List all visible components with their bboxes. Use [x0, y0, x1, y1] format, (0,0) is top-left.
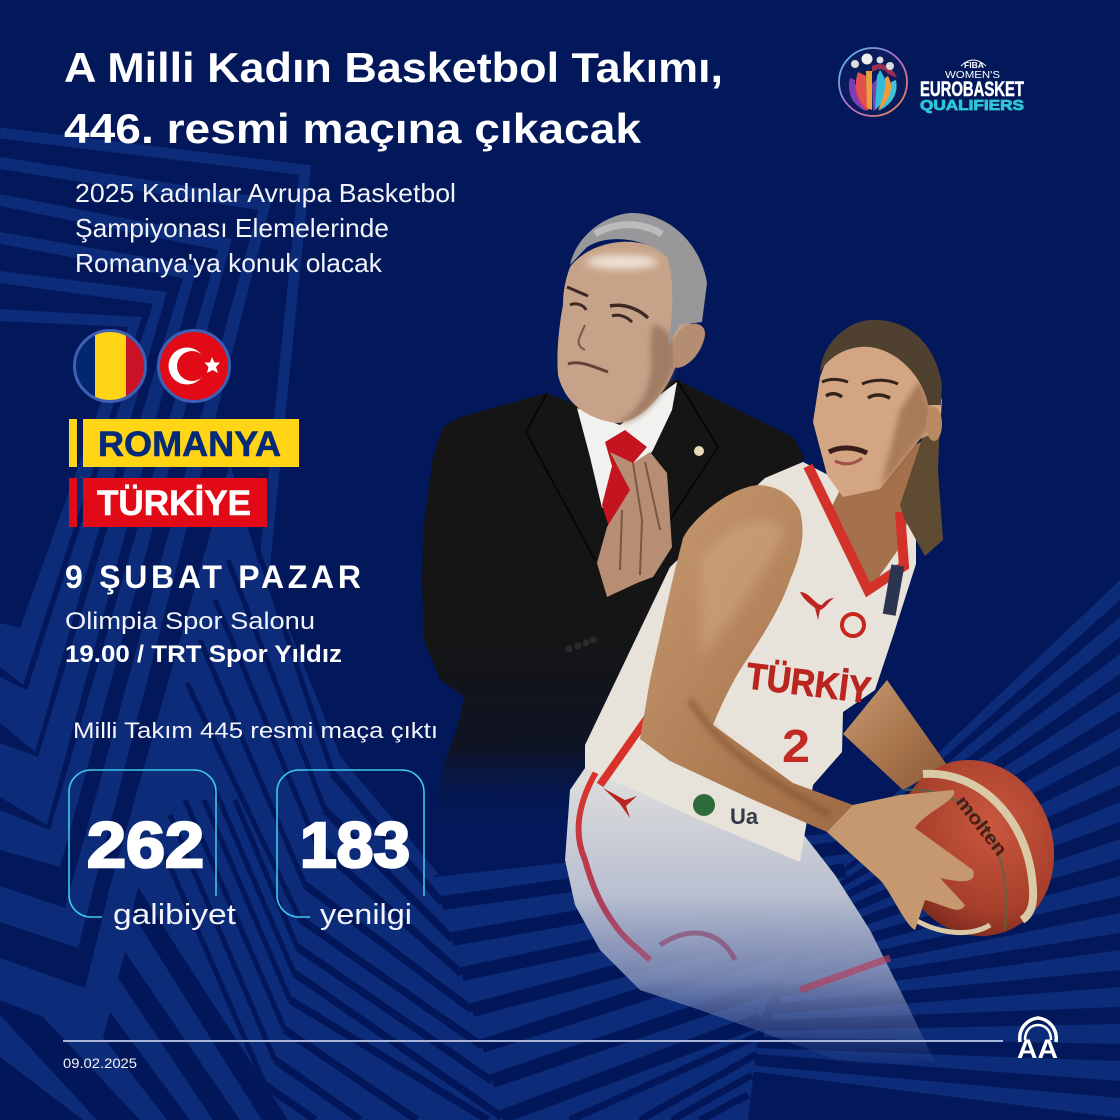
player back arm	[843, 680, 947, 790]
jersey sponsor	[693, 794, 759, 829]
coach head	[557, 213, 707, 423]
icon: Anadolu Agency logo: AA	[1017, 1034, 1058, 1064]
player neck	[830, 440, 925, 592]
team label: Romanya: ROMANYA	[98, 425, 281, 464]
date: 09.02.2025	[63, 1056, 137, 1071]
logo wordmark: QUALIFIERS	[920, 97, 1024, 114]
time and broadcaster: 19.00 / TRT Spor Yıldız	[65, 641, 342, 668]
coach jacket	[422, 380, 805, 840]
logo emblem	[839, 48, 907, 116]
flag: Romania	[74, 330, 146, 402]
jersey wordmark: TÜRKİY	[744, 655, 873, 711]
subtitle: Romanya'ya konuk olacak	[75, 248, 383, 278]
player ear	[926, 407, 942, 441]
stat: losses: yenilgi	[320, 899, 412, 931]
shorts puma logo	[603, 788, 637, 818]
title	[64, 44, 723, 152]
basketball	[873, 739, 1077, 957]
match date: 9 ŞUBAT PAZAR	[65, 559, 361, 595]
photo: player	[565, 320, 1077, 1065]
coach ear	[673, 324, 705, 368]
title: 446. resmi maçına çıkacak	[64, 105, 642, 152]
logo wordmark: FIBA	[964, 61, 984, 70]
player shorts	[565, 768, 935, 1065]
subtitle	[75, 178, 456, 278]
team label: Türkiye: TÜRKİYE	[97, 484, 251, 523]
team label: Romanya	[69, 419, 299, 467]
jersey number: 2	[782, 720, 810, 772]
footer rule	[63, 1040, 1003, 1042]
player collar	[808, 466, 904, 590]
player front arm	[640, 485, 973, 930]
venue: Olimpia Spor Salonu	[65, 608, 315, 635]
stat: wins: 262	[87, 809, 204, 881]
stats heading: Milli Takım 445 resmi maça çıktı	[73, 718, 438, 743]
coach tie	[602, 430, 647, 530]
coach shirt	[577, 382, 677, 508]
coach hair	[570, 213, 707, 345]
coach hands	[597, 452, 672, 597]
icon: Anadolu Agency logo	[1017, 1018, 1058, 1064]
player head	[813, 320, 942, 497]
jersey patch	[883, 564, 904, 616]
stat: wins	[69, 770, 236, 931]
jersey crest	[842, 614, 864, 636]
coach sleeve buttons	[565, 636, 597, 653]
subtitle: Şampiyonası Elemelerinde	[75, 213, 389, 243]
event logo: FIBA Women's EuroBasket Qualifiers	[839, 48, 1024, 116]
player hand on ball	[827, 790, 974, 930]
flag: Turkey	[158, 330, 230, 402]
basketball: molten	[951, 792, 1011, 860]
player ponytail	[900, 420, 943, 556]
stat: losses	[277, 770, 424, 931]
logo wordmark: EUROBASKET	[920, 78, 1024, 101]
photo: coach	[422, 213, 805, 840]
subtitle: 2025 Kadınlar Avrupa Basketbol	[75, 178, 456, 208]
player hair	[820, 320, 942, 405]
coach lapels	[526, 380, 718, 560]
shorts side stripe	[579, 772, 650, 960]
logo wordmark: WOMEN'S	[945, 70, 1000, 81]
team label: Türkiye	[69, 478, 267, 527]
title: A Milli Kadın Basketbol Takımı,	[64, 44, 723, 91]
jersey puma logo	[800, 592, 834, 620]
jersey sponsor: Ua	[730, 804, 759, 829]
stat: wins: galibiyet	[113, 899, 236, 931]
jersey trim	[600, 710, 653, 785]
logo wordmark	[920, 60, 1024, 114]
stat: losses: 183	[300, 809, 410, 881]
coach eyes and mouth	[567, 287, 648, 372]
coach lapel pin	[694, 446, 704, 456]
player jersey	[585, 462, 916, 862]
player face details	[822, 379, 898, 464]
